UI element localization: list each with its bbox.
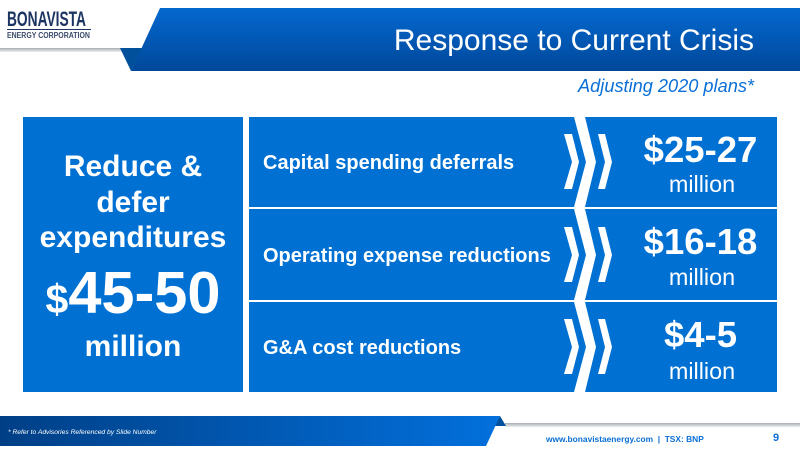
chevrons: [564, 117, 612, 207]
amount: $16-18: [644, 221, 757, 262]
row label: Capital spending deferrals: [263, 152, 514, 174]
unit: million: [669, 264, 735, 290]
row: operating expense: [249, 209, 777, 300]
total amount: $45-50: [46, 259, 220, 326]
heading: reduce and defer: expenditures: [40, 221, 226, 254]
unit: million: million: [85, 330, 181, 363]
logo: BONAVISTA: [7, 8, 86, 31]
row label: Operating expense reductions: [263, 245, 551, 267]
panel: total reduction: [23, 117, 243, 392]
amount: $4-5: [664, 314, 737, 355]
chevrons: [564, 209, 612, 300]
footnote: * Refer to Advisories Referenced by Slide Number: [8, 429, 156, 436]
subtitle: Adjusting 2020 plans*: [578, 76, 754, 96]
row label: G&A cost reductions: [263, 337, 461, 359]
row: G&A cost: [249, 302, 777, 392]
row: capital spending: [249, 117, 777, 207]
title: Response to Current Crisis: [394, 24, 754, 57]
chevrons: [564, 302, 612, 392]
unit: million: [669, 358, 735, 384]
footer website: www.bonavistaenergy.com | TSX: BNP: [546, 434, 704, 444]
logo: [7, 8, 91, 40]
unit: million: [669, 171, 735, 197]
heading: reduce and defer: defer: [96, 186, 170, 218]
heading: reduce and defer: Reduce &: [64, 150, 202, 183]
page number: 9: [773, 432, 779, 444]
heading: reduce and defer: [40, 150, 226, 254]
logo: ENERGY CORPORATION: [7, 31, 90, 40]
amount: $25-27: [644, 129, 757, 170]
